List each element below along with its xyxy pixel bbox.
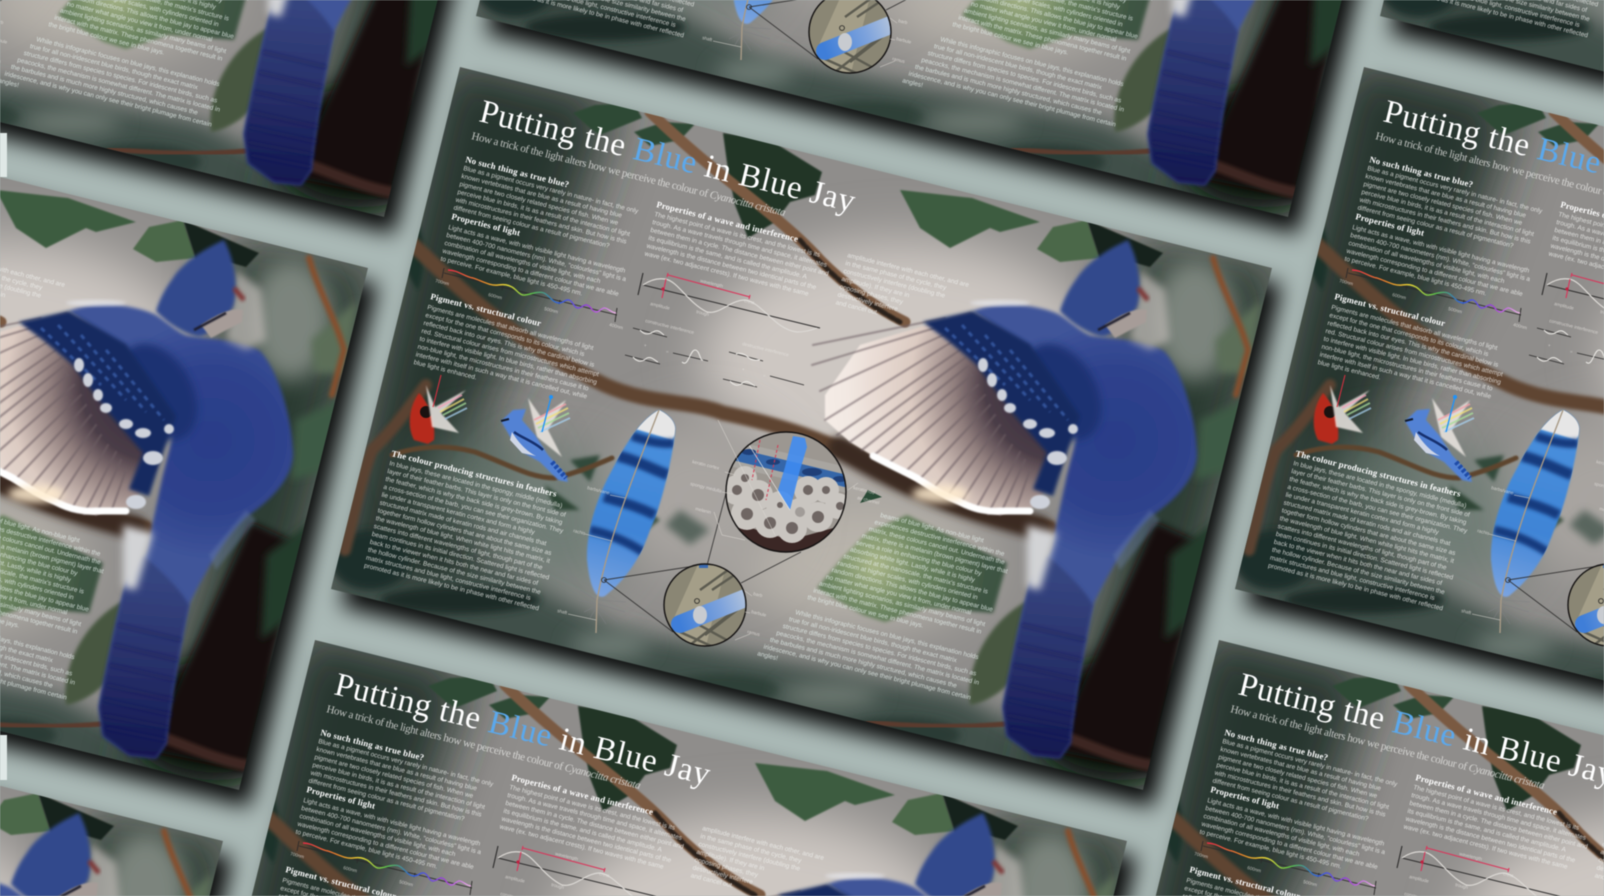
- light burst: [426, 385, 466, 433]
- diagram labels: shaft: [557, 608, 568, 616]
- text: properties of a wave and interference: its equilibrium is the same, and is called the amplitude. A: [648, 235, 808, 281]
- tail: [1003, 555, 1093, 758]
- spectrum chart: 600nm: [488, 292, 503, 300]
- diagram labels: keratin rod: [853, 485, 875, 495]
- text: wave interference continued: amplitude interfere with each other, and are: [847, 252, 970, 289]
- text: closing note: true for all non-iridescent blue birds, though the exact matrix: [788, 616, 958, 664]
- crest and head: [1060, 240, 1170, 350]
- text: properties of a wave and interference: wave (ex. two adjacent crests). If two waves with the same: [643, 250, 810, 298]
- text: colour producing structures: together form hollow cylinders that are about the same size as: [377, 507, 553, 557]
- text: closing note: iridescence, and is why you can only see their bright plumage from certain: [763, 644, 972, 702]
- text: pigment vs structural colour: reflected back into our eyes. This is why the cardinal below is: [423, 320, 596, 369]
- text: closing note: structure differs from species to species. For iridescent birds, such as: [782, 623, 978, 678]
- constructive interference diagram: +: [644, 343, 647, 348]
- text: colour producing structures: lie under a transparent keratin cortex and form a highly: [381, 492, 536, 536]
- constructive interference diagram: [625, 318, 708, 364]
- text: no such thing as true blue: known vertebrates that are blue as a result of having blue: [461, 173, 623, 220]
- magnifier: barb and barbules: [660, 560, 750, 650]
- body: [973, 305, 1197, 758]
- title: Putting the Blue in Blue Jay: [476, 94, 859, 220]
- text: colour producing structures: beam continues in its initial direction. Scattered light is reflected: [371, 531, 550, 582]
- text: colour producing structures: the hollow cylinder. Because of the size similarity between the: [367, 547, 542, 596]
- spectrum chart: 400nm: [609, 322, 624, 330]
- diagram labels: spongy medulla: [690, 481, 723, 494]
- text: properties of a wave and interference: wavelength is the distance between two identical parts of the: [645, 242, 817, 291]
- text: colour producing structures: a cross-section of the barb, you can see their organization. They: [383, 484, 565, 535]
- text: wave interference continued: opposing phases, they: [839, 284, 904, 306]
- constructive interference diagram: constructive interference: [645, 318, 695, 335]
- text: no such thing as true blue: perceive blue in birds, it is as a result of the interaction of light: [457, 189, 631, 238]
- big blue jay: [812, 240, 1197, 758]
- spectrum chart: 500nm: [544, 306, 559, 314]
- text: closing note: peacocks, the mechanism is somewhat different. The matrix is located in: [776, 630, 980, 687]
- text: properties of a wave and interference: The highest point of a wave is its crest, and the lowest is its: [654, 211, 821, 259]
- text: properties of light: combination of all wavelengths of visible light, with each: [444, 240, 601, 285]
- diagram labels: barbs/vane: [587, 485, 610, 496]
- destructive interference diagram: =: [763, 373, 766, 378]
- poster background: [320, 50, 1290, 800]
- text: properties of light: Light acts as a wave, with with visible light having a wavelength: [448, 224, 626, 275]
- text: closing note: the barbules and is much more highly structured, which causes the: [769, 637, 958, 690]
- magnifier: barb cross-section: [724, 430, 848, 554]
- text: properties of light: Properties of light: [451, 211, 521, 238]
- poster tile: central: [320, 50, 1290, 800]
- text: wave interference continued: amplitude). If they are in: [841, 276, 910, 299]
- text: no such thing as true blue: Blue as a pigment occurs very rarely in nature- in fact, the only: [463, 165, 640, 215]
- text: no such thing as true blue: with microstructures in their feathers and skin. But how is this: [454, 196, 628, 246]
- destructive interference diagram: [723, 341, 804, 387]
- repeated poster tile: upper row: [0, 0, 1604, 227]
- zoom connector lines: [604, 493, 801, 632]
- text: pigment vs structural colour: interfere with itself in such a way that it is cancelled out, while: [415, 351, 588, 401]
- text: wave interference continued: constructively interfere (doubling the: [843, 268, 946, 300]
- text: properties of a wave and interference: between them in a cycle. The distance between either point and: [650, 227, 830, 278]
- text: no such thing as true blue: No such thing as true blue?: [465, 154, 570, 190]
- wave anatomy chart: crest: [744, 298, 755, 306]
- text: colour producing structures: the feather, which is why the back side is grey-brown. By taking: [385, 476, 563, 527]
- text: colour producing structures: layer of their feather barbs. This layer is only on the front side of: [387, 468, 566, 519]
- blue ray: [542, 397, 551, 432]
- text: colour producing structures: The colour producing structures in feathers: [391, 448, 558, 499]
- diagram labels: air channel: [857, 495, 880, 505]
- text: colour producing structures continued: absorbing white light. Lastly, while it is highly: [849, 546, 976, 584]
- text: colour producing structures continued: structured at the nanoscale, the matrix's structure is: [843, 553, 989, 596]
- diagram labels: [557, 420, 880, 640]
- rump marking: [1113, 510, 1160, 570]
- light burst: [528, 398, 566, 457]
- text: properties of a wave and interference: trough. As a wave travels through time and space, it alternates: [652, 219, 828, 269]
- text: pigment vs structural colour: [413, 291, 606, 410]
- text: colour producing structures: structured matrix made of keratin rods and air channels that: [379, 499, 547, 548]
- small cardinal: [410, 375, 467, 444]
- red ray: [433, 375, 441, 407]
- text: pigment vs structural colour: Pigment vs. structural colour: [430, 291, 542, 328]
- text: colour producing structures: In blue jays, these are located in the spongy, middle (medulla): [389, 460, 563, 510]
- diagram labels: barb: [753, 591, 763, 598]
- small blue jay: [501, 395, 570, 482]
- coverts: [923, 311, 1080, 509]
- text: colour producing structures continued: random directions. This allows the blue jay to appear blue: [831, 567, 994, 614]
- under-tail white patch: [1027, 525, 1057, 590]
- text: closing note: While this infographic focuses on blue jays, this explanation holds: [795, 609, 980, 661]
- text: colour producing structures continued: experiences destructive interference within the: [874, 519, 1006, 558]
- wing feathers: [812, 312, 1070, 515]
- body shading near wing: [1007, 330, 1117, 454]
- wave anatomy chart: wavelength: [700, 278, 724, 289]
- text: colour producing structures: scatters into different wavelengths of light, though part of the: [373, 523, 544, 572]
- text: closing note: angles!: [756, 650, 779, 662]
- text: colour producing structures continued: serves a role in enhancing the blue colour by: [855, 540, 983, 577]
- text: colour producing structures continued: random at higher scales, with cylinders oriented in: [837, 560, 979, 601]
- text: properties of light: wavelength corresponding to a different colour that we are able: [441, 247, 620, 298]
- text: pigment vs structural colour: non-blue light, the microstructures in their feathers cause it to: [417, 343, 590, 393]
- diagram labels: melanin: [695, 506, 712, 515]
- subtitle: How a trick of the light alters how we perceive the colour of Cyanocitta cristata: [470, 130, 787, 219]
- text: no such thing as true blue: [452, 154, 640, 255]
- bright rim light: [970, 300, 1030, 306]
- diagram labels: ramus: [747, 629, 761, 637]
- text: no such thing as true blue: different from seeing colour as a result of pigmentation?: [453, 204, 610, 250]
- spectrum chart: [435, 268, 624, 330]
- text: properties of light: [439, 211, 629, 307]
- text: wave interference continued: in the same phase of the cycle, they: [845, 260, 948, 292]
- diagram labels: rachis: [573, 528, 587, 536]
- destructive interference diagram: destructive interference: [742, 341, 790, 358]
- text: colour producing structures continued: the bright blue colour we see in blue jays.: [807, 594, 924, 630]
- text: pigment vs structural colour: blue light is enhanced.: [413, 359, 478, 382]
- text: colour producing structures continued: no matter what angle you view it from, under normal: [825, 574, 973, 617]
- text: pigment vs structural colour: except for the one that corresponds to its colour, which is: [425, 312, 586, 358]
- repeated poster tile: lower row: [0, 623, 1604, 896]
- text: colour producing structures continued: interact with the matrix. These phenomena together result in: [812, 587, 982, 636]
- constructive interference diagram: =: [666, 349, 669, 354]
- feather: [578, 405, 690, 633]
- text: colour producing structures continued: ambient lighting scenarios, as similarly many beams of light: [818, 580, 986, 628]
- text: pigment vs structural colour: to interfere with visible light. In blue birds, rather than absorbing: [419, 336, 598, 386]
- text: pigment vs structural colour: Pigments are molecules that absorb all wavelengths of light: [427, 304, 594, 352]
- diagram labels: barbule: [751, 609, 767, 618]
- text: properties of light: between 400-700 nanometers (nm). White, "colourless" light is a: [446, 232, 627, 283]
- text: colour producing structures: the wavelength of blue light. When white light hits the matrix, it: [375, 515, 551, 565]
- text: properties of a wave and interference: [643, 199, 834, 301]
- text: colour producing structures: promoted as it is more likely to be in phase with other reflected: [363, 562, 540, 612]
- text: colour producing structures: [363, 448, 570, 614]
- text: colour producing structures: matrix structures and blue light, constructive interference is: [365, 555, 532, 602]
- background leaves: [403, 103, 1262, 705]
- text: properties of light: to perceive. For example, blue light is 450-495 nm.: [440, 256, 583, 298]
- text: no such thing as true blue: pigment are two closely related species of fish. When we: [459, 181, 619, 227]
- text: pigment vs structural colour: red. Structural colour arises from microstructures which attempt: [421, 328, 600, 378]
- trunk behind the jay: [1050, 522, 1205, 770]
- text: colour producing structures continued: matrix, these colours cancel out. Underneath the: [868, 526, 1006, 566]
- diagram labels: keratin cortex: [692, 459, 720, 471]
- text: wave interference continued: and cancel out.: [835, 299, 880, 317]
- destructive interference diagram: +: [742, 367, 745, 372]
- text: colour producing structures: back to the viewer when it hits both the near and far sides of: [369, 539, 539, 587]
- wave anatomy chart: [638, 273, 820, 332]
- branches: [345, 112, 1248, 765]
- text: properties of a wave and interference: Properties of a wave and interference: [656, 199, 799, 244]
- wave anatomy chart: trough: [696, 309, 710, 317]
- text: colour producing structures continued: matrix, there is a melanin (brown pigment) layer that: [861, 533, 1008, 575]
- spectrum chart: 700nm: [435, 278, 450, 286]
- text: wave interference continued: destructively interfere: [837, 291, 899, 313]
- wave anatomy chart: amplitude: [650, 301, 671, 311]
- text: colour producing structures continued: beams of blue light. As non-blue light: [880, 512, 985, 545]
